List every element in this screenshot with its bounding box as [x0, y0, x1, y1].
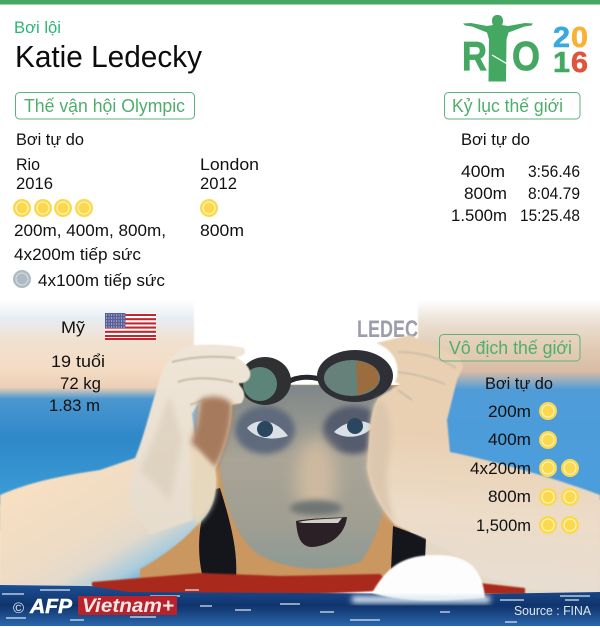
London 2012 label: London — [200, 156, 259, 174]
Rio gold events: 4x200m tiếp sức — [14, 246, 141, 264]
panel: world records table: 800m — [464, 185, 507, 203]
age height weight: 72 kg — [60, 375, 101, 393]
panel: world championships medals: 800m — [488, 488, 531, 506]
Rio 2016 label: Rio — [16, 156, 40, 174]
credit: AFP Vietnam+ — [13, 596, 177, 618]
credit: AFP Vietnam+: AFP — [29, 596, 73, 618]
panel: world records table: Bơi tự do — [461, 131, 530, 149]
Olympic discipline: Bơi tự do — [16, 131, 84, 149]
top green bar — [0, 0, 600, 4]
panel: world records table: 15:25.48 — [520, 207, 580, 225]
London 2012 label — [200, 156, 259, 193]
icon: Rio 2016 logo: R — [462, 33, 487, 79]
icon: Rio 2016 logo: O — [512, 33, 540, 79]
panel: world championships medals — [470, 375, 579, 535]
Rio 2016 label: 2016 — [16, 175, 53, 193]
panel: world championships medals: 400m — [488, 431, 531, 449]
panel: world championships medals: 4x200m — [470, 460, 531, 478]
icon: US flag — [105, 313, 156, 340]
London 2012 label: 2012 — [200, 175, 237, 193]
credit: AFP Vietnam+: © — [13, 600, 24, 617]
Rio silver event: 4x100m tiếp sức — [38, 272, 165, 290]
age height weight — [49, 353, 105, 415]
cap lettering: LEDEC — [357, 316, 418, 343]
icon: Rio 2016 logo: 1 — [553, 47, 570, 79]
title: Katie Ledecky — [15, 39, 202, 74]
London gold event: 800m — [200, 222, 244, 240]
panel: world records table: 1.500m — [451, 207, 507, 225]
age height weight: 1.83 m — [49, 397, 100, 415]
Rio gold events: 200m, 400m, 800m, — [14, 222, 166, 240]
icon: Rio 2016 logo: 6 — [571, 47, 588, 79]
heading: sport: Bơi lội — [14, 18, 61, 37]
icon: silver medal — [13, 270, 31, 288]
age height weight: 19 tuổi — [51, 353, 105, 371]
Rio gold events — [14, 222, 166, 264]
panel: world records heading — [444, 92, 580, 119]
panel: world records table: 3:56.46 — [528, 163, 580, 181]
panel: Olympic results — [13, 131, 259, 290]
panel: world championships heading — [440, 334, 580, 361]
icon: Rio 2016 logo: 0 — [571, 22, 588, 54]
panel: world championships heading: Vô địch thế giới — [449, 338, 572, 358]
credit: AFP Vietnam+: Vietnam+ — [82, 596, 174, 617]
panel: athlete profile — [49, 313, 156, 415]
Rio 2016 label — [16, 156, 53, 193]
icon: Rio 2016 logo — [462, 15, 588, 82]
panel: world records table: 400m — [461, 163, 505, 181]
panel: Olympic heading: Thế vận hội Olympic — [24, 96, 185, 116]
goggles — [239, 350, 393, 405]
panel: world records table: 8:04.79 — [528, 185, 580, 203]
icon: four gold medals — [13, 199, 93, 217]
photo: swimmer — [0, 296, 600, 628]
icon: gold medals — [539, 402, 579, 534]
icon: London gold medal — [200, 199, 218, 217]
panel: world championships medals: 1,500m — [476, 517, 531, 535]
icon: Rio 2016 logo: 2 — [553, 22, 570, 54]
country: Mỹ — [61, 319, 86, 337]
source note: Source : FINA — [514, 603, 591, 618]
panel: world championships medals: 200m — [488, 403, 531, 421]
panel: world championships medals: Bơi tự do — [485, 375, 553, 393]
panel: Olympic heading — [16, 92, 194, 119]
panel: world records heading: Kỷ lục thế giới — [452, 96, 563, 116]
panel: world records table — [451, 131, 580, 225]
